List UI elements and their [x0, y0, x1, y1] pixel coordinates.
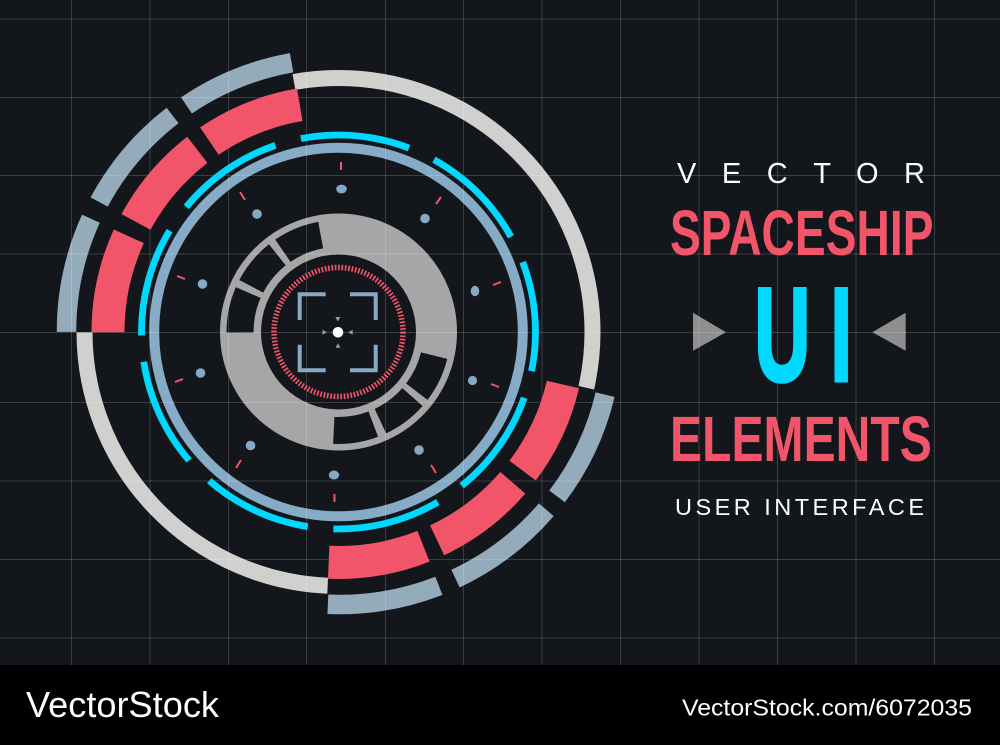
outer white ring	[84, 78, 592, 586]
footer image id: VectorStock.com/6072035	[682, 694, 972, 720]
outer blue-gray segmented ring	[66, 58, 612, 604]
heading: ELEMENTS: ELEMENTS	[670, 403, 932, 475]
blue marker dots	[196, 185, 479, 480]
icon: right gray triangle	[872, 313, 906, 351]
footer logo: VectorStock	[26, 684, 220, 725]
heading: VECTOR: VECTOR	[677, 158, 925, 190]
targeting brackets	[300, 294, 376, 370]
gray dial cutouts	[240, 234, 437, 430]
cyan segmented ring	[142, 135, 536, 529]
centre white dot	[333, 327, 343, 338]
heading: SPACESHIP: SPACESHIP	[670, 198, 934, 269]
centre crosshair arrows	[322, 317, 353, 348]
central gray dial ring	[240, 234, 436, 430]
heading: UI: UI	[754, 262, 852, 410]
red segmented ring	[108, 102, 569, 562]
red tick marks	[175, 162, 501, 502]
footer bar	[0, 665, 1000, 745]
icon: left gray triangle	[693, 313, 726, 351]
steel blue ring	[154, 148, 523, 516]
red tick dial	[274, 268, 403, 396]
subheading: USER INTERFACE: USER INTERFACE	[675, 494, 924, 520]
